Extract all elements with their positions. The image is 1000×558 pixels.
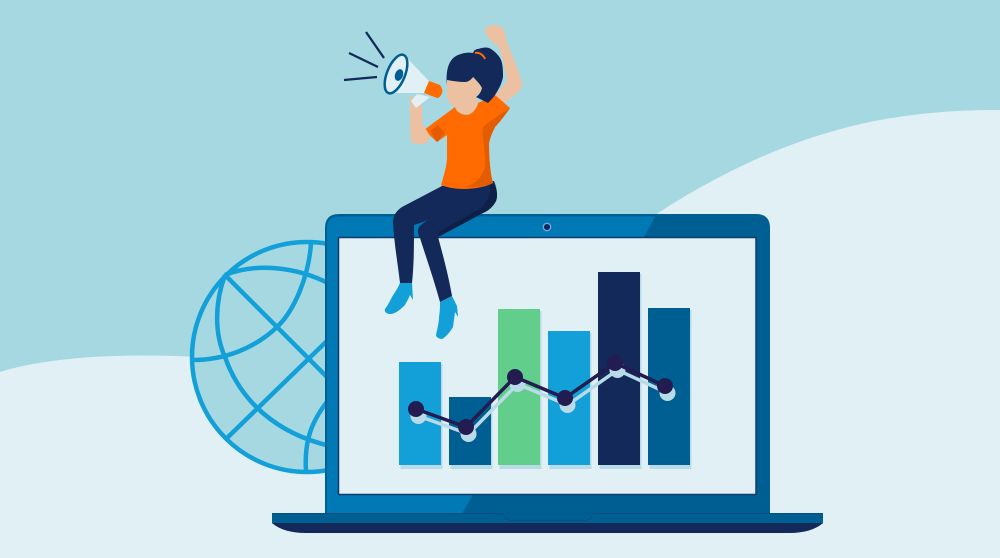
front leg shading — [438, 182, 497, 236]
laptop lid — [325, 214, 770, 514]
bar shadows — [400, 274, 692, 469]
megaphone driver — [393, 68, 405, 82]
left shoe — [385, 283, 413, 314]
megaphone handle — [411, 94, 430, 108]
megaphone — [380, 52, 442, 108]
front leg — [418, 181, 497, 302]
bar chart — [399, 272, 692, 469]
bar 1 — [399, 362, 441, 465]
megaphone mouth — [380, 52, 412, 96]
face — [447, 74, 483, 115]
bar 6 — [648, 308, 690, 465]
holding arm — [410, 96, 430, 144]
back leg — [393, 186, 470, 283]
right shoe — [436, 296, 458, 339]
raised arm — [485, 25, 522, 106]
bar 2 — [449, 397, 491, 465]
icon: globe — [192, 242, 422, 472]
megaphone cone — [393, 57, 429, 93]
woman — [344, 25, 522, 339]
hair tie — [475, 53, 485, 59]
hair — [447, 48, 503, 103]
shirt shadow — [463, 108, 510, 187]
laptop — [272, 214, 823, 533]
sleeve fold — [430, 125, 445, 142]
base top edge and trackpad notch — [272, 514, 823, 520]
laptop front edge — [272, 523, 823, 533]
line shadow — [410, 362, 676, 442]
bar 5 — [598, 272, 640, 465]
line chart — [408, 355, 673, 435]
shirt — [424, 95, 510, 189]
bar 3 — [498, 309, 540, 465]
webcam — [543, 223, 551, 231]
laptop screen — [338, 238, 756, 494]
sound rays — [344, 32, 384, 80]
megaphone rear — [424, 81, 442, 98]
bar 4 — [548, 331, 590, 465]
lid highlight — [327, 216, 655, 514]
laptop base — [272, 513, 823, 524]
